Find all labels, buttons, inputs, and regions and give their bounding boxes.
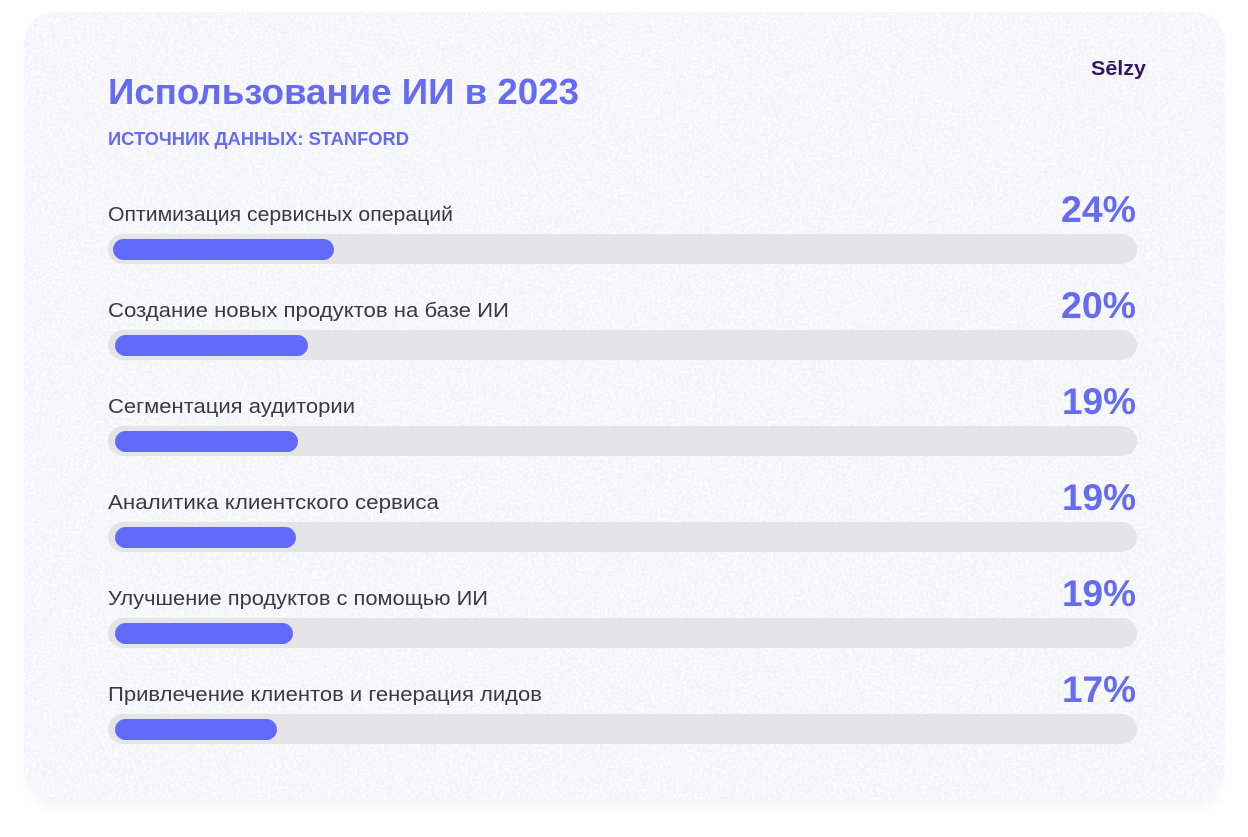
row: new AI products (108, 285, 1137, 360)
row: audience segmentation (108, 381, 1137, 456)
row: new AI products: 20% (1061, 285, 1136, 326)
row: audience segmentation: 19% (1062, 381, 1136, 422)
row: new AI products: Создание новых продуктов на базе ИИ (108, 300, 509, 322)
row: product improvement (108, 573, 1137, 648)
logo: Selzy: Sēlzy (1091, 58, 1147, 80)
row: service operations: 24% (1061, 189, 1136, 230)
row: service operations (108, 189, 1137, 264)
row: lead generation: 17% (1062, 669, 1136, 710)
row: service operations: Оптимизация сервисных операций (108, 204, 453, 226)
subtitle: data source: ИСТОЧНИК ДАННЫХ: STANFORD (108, 129, 409, 149)
row: product improvement: Улучшение продуктов с помощью ИИ (108, 588, 488, 610)
row: lead generation: Привлечение клиентов и генерация лидов (108, 684, 542, 706)
title: Использование ИИ в 2023 (108, 71, 579, 112)
row: product improvement: 19% (1062, 573, 1136, 614)
row: customer service analytics (108, 477, 1137, 552)
row: customer service analytics: 19% (1062, 477, 1136, 518)
row: lead generation (108, 669, 1137, 744)
row: customer service analytics: Аналитика клиентского сервиса (108, 492, 440, 514)
row: audience segmentation: Сегментация аудитории (108, 396, 355, 418)
